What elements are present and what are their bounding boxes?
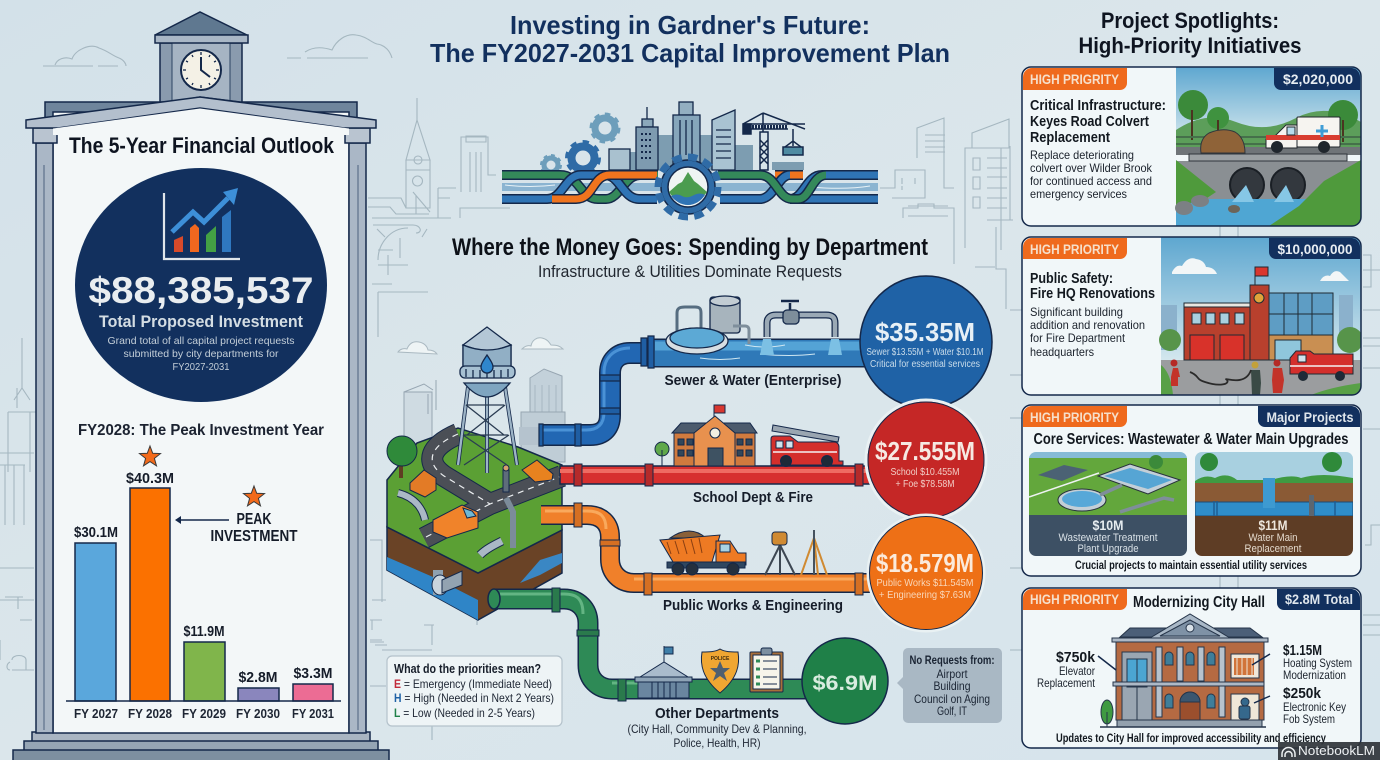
image: wastewater plant [1029,452,1187,556]
icon: ambulance [1266,117,1340,152]
caption: Updates to City Hall for improved accessibility and efficiency [1056,733,1326,745]
description: FY2027-2031 [172,361,230,373]
callout: peak investment: INVESTMENT [210,528,298,545]
project description: addition and renovation [1030,318,1145,332]
callout: no requests: No Requests from: [910,653,994,667]
icon: roof and clock tower [45,12,357,121]
heading: modernizing city hall: Modernizing City Hall [1133,594,1265,611]
icon: skyline [609,102,735,170]
heading: where the money goes: Where the Money Goes: Spending by Department [452,234,928,261]
panel: total investment circle [75,168,327,402]
icon: crane [743,113,805,170]
project description: Significant building [1030,305,1123,319]
circle: school and fire total [866,400,986,520]
total amount: $88,385,537 [88,270,314,311]
icon: small gears [542,114,618,174]
icon: school [655,405,757,466]
callout: peak investment [175,486,298,545]
bar chart: annual investment [66,470,341,721]
circle: sewer and water total: $35.35M [875,317,975,347]
badge: cost: $10,000,000 [1278,242,1352,257]
subheading: Infrastructure & Utilities Dominate Requests [538,262,842,281]
label: other departments: (City Hall, Community Dev & Planning, [628,722,806,736]
icon: fire truck [771,425,843,466]
circle: public works total: + Engineering $7.63M [879,589,971,601]
heading: project spotlights [1078,8,1302,58]
project title: Keyes Road Colvert [1030,114,1149,130]
legend: priorities: What do the priorities mean? [394,662,541,676]
badge: priority: HIGH PRIORITY [1030,242,1119,257]
project title: Public Safety: [1030,271,1113,287]
label: public works and engineering: Public Works & Engineering [663,597,843,614]
legend: priorities: L = Low (Needed in 2-5 Years) [394,706,535,720]
badge: total [1277,589,1360,610]
image: wastewater plant: Wastewater Treatment [1058,532,1158,544]
image: culvert with ambulance [1175,67,1361,226]
circle: other departments total [802,638,888,724]
panel: keyes road culvert [1022,67,1361,226]
label: key fob system [1283,686,1346,726]
circle: public works total: Public Works $11.545M [876,577,974,589]
badge: cost: $2,020,000 [1283,72,1353,87]
heading: peak investment year: FY2028: The Peak Investment Year [78,422,324,439]
pipe: blue sewer and water [519,336,865,446]
panel: financial outlook building [13,12,389,760]
bar chart: annual investment: $30.1M [74,524,118,541]
icon: braided pipes [502,175,878,199]
icon: vehicles [410,460,553,538]
label: elevator replacement: Replacement [1037,676,1096,690]
badge: cost [1269,238,1360,259]
heading: the 5-year financial outlook: The 5-Year Financial Outlook [69,133,335,158]
icon: star over peak bar [140,446,160,466]
icon: isometric city block [387,428,562,620]
callout: peak investment: PEAK [236,511,272,528]
icon: tree [387,436,417,478]
label: elevator replacement: $750k [1056,650,1096,666]
icon: police badge: POLICE [711,656,730,662]
project title [1030,271,1155,302]
badge: priority: HIGH PRIGRITY [1030,72,1119,87]
label: school and fire: School Dept & Fire [693,489,813,506]
icon: fire engine [1290,351,1353,380]
badge: priority [1023,406,1127,427]
badge: priority [1023,589,1127,610]
icon: city, gears and pipes banner [502,102,878,217]
badge: cost [1274,68,1360,90]
icon: clipboard [750,648,783,692]
label: hoating system [1283,643,1352,682]
watermark: notebooklm [1278,742,1380,760]
badge: total: $2.8M Total [1285,592,1353,607]
icon: sewer treatment and water faucet [666,296,842,355]
project description: emergency services [1030,187,1127,201]
bar chart: annual investment: FY 2030 [236,706,280,721]
project description: headquarters [1030,345,1094,359]
bar chart: annual investment: $3.3M [294,665,332,682]
description [108,335,294,373]
icon: steps [13,732,389,760]
badge: priority [1023,238,1127,259]
legend: priorities [387,656,562,726]
water [502,183,878,191]
badge: priority [1023,68,1127,90]
label: hoating system: Hoating System [1283,656,1352,670]
label: other departments [628,705,806,750]
image: wastewater plant: $10M [1092,517,1124,533]
callout: no requests: Golf, IT [937,704,968,718]
project description [1030,305,1145,359]
description: Grand total of all capital project requests [108,335,294,347]
label: hoating system: $1.15M [1283,643,1322,659]
label: total proposed investment: Total Proposed Investment [99,312,303,331]
pipe: red school and fire [560,464,875,486]
label: key fob system: $250k [1283,686,1322,702]
project description: for continued access and [1030,174,1152,188]
title: The FY2027-2031 Capital Improvement Plan [430,38,950,68]
callout: no requests: Airport [936,667,968,681]
callout: no requests [897,648,1002,723]
heading: project spotlights: Project Spotlights: [1101,8,1279,33]
label: other departments: Other Departments [655,705,779,722]
bar chart: annual investment: FY 2031 [292,706,334,721]
bar chart: annual investment: $2.8M [238,669,278,686]
icon: small clouds [398,338,563,354]
project description: for Fire Department [1030,331,1126,345]
panel: modernizing city hall [1022,588,1361,748]
icon: city hall building [1098,614,1270,727]
label: key fob system: Fob System [1283,712,1335,726]
title [430,10,950,68]
description: submitted by city departments for [124,348,279,360]
icon: police badge [701,649,739,693]
label: sewer and water: Sewer & Water (Enterprise) [664,372,842,389]
image: water main: Water Main [1248,532,1298,544]
label: elevator replacement: Elevator [1059,664,1095,678]
pipe: orange public works [541,503,874,595]
pipe: green other departments [488,588,807,701]
circle: public works total [868,515,984,631]
icon: firefighters and hose [1170,360,1284,395]
icon: water tower [458,327,517,473]
caption: Crucial projects to maintain essential utility services [1075,560,1307,572]
badge: major projects [1258,406,1360,427]
icon: background city behind water tower [404,369,565,464]
label: hoating system: Modernization [1283,668,1346,682]
callout: no requests: Council on Aging [914,692,990,706]
panel: fire hq renovations [1022,237,1363,395]
panel: white building body [53,112,349,733]
legend: priorities: H = High (Needed in Next 2 Years) [394,691,554,705]
image: fire station [1159,237,1363,395]
circle: school and fire total: School $10.455M [890,466,960,478]
title: Investing in Gardner's Future: [510,10,870,40]
circle: school and fire total: + Foe $78.58M [896,478,954,490]
image: water main: $11M [1258,517,1288,533]
icon: city hall [635,646,692,698]
bar chart: annual investment: FY 2027 [74,706,118,721]
project description: colvert over Wilder Brook [1030,161,1153,175]
project title: Critical Infrastructure: [1030,98,1166,114]
circle: sewer and water total: Critical for essential services [870,359,980,370]
bar chart: annual investment: FY 2029 [182,706,226,721]
icon: survey tripods [765,530,827,575]
heading: project spotlights: High-Priority Initiatives [1078,33,1302,58]
project title [1030,98,1166,146]
label: key fob system: Electronic Key [1283,700,1346,714]
project title: Fire HQ Renovations [1030,286,1155,302]
icon: dump truck [660,531,746,575]
bar chart: annual investment: $40.3M [126,470,174,487]
icon: central gear [658,157,718,217]
circle: public works total: $18.579M [876,548,974,578]
image: water main: Replacement [1244,543,1302,555]
icon: growth chart [164,188,240,259]
circle: sewer and water total: Sewer $13.55M + Water $10.1M [866,347,984,358]
bar chart: annual investment: FY 2028 [128,706,172,721]
badge: priority: HIGH PRIORITY [1030,410,1119,425]
project description [1030,148,1153,201]
project description: Replace deteriorating [1030,148,1134,162]
label: other departments: Police, Health, HR) [674,736,760,750]
badge: priority: HIGH PRIORITY [1030,592,1119,607]
image: water main [1195,452,1353,556]
bar chart: annual investment: $11.9M [184,623,224,640]
circle: school and fire total: $27.555M [875,436,975,466]
callout: no requests: Building [934,679,970,693]
circle: other departments total: $6.9M [812,672,878,695]
legend: priorities: E = Emergency (Immediate Need) [394,677,552,691]
image: wastewater plant: Plant Upgrade [1078,543,1138,555]
panel: wastewater and water main [1022,405,1361,576]
badge: major projects: Major Projects [1266,410,1354,425]
watermark: notebooklm: NotebookLM [1298,743,1375,758]
circle: sewer and water total [860,276,992,408]
project title: Replacement [1030,130,1110,146]
label: elevator replacement [1037,650,1096,690]
icon: columns [26,97,376,733]
